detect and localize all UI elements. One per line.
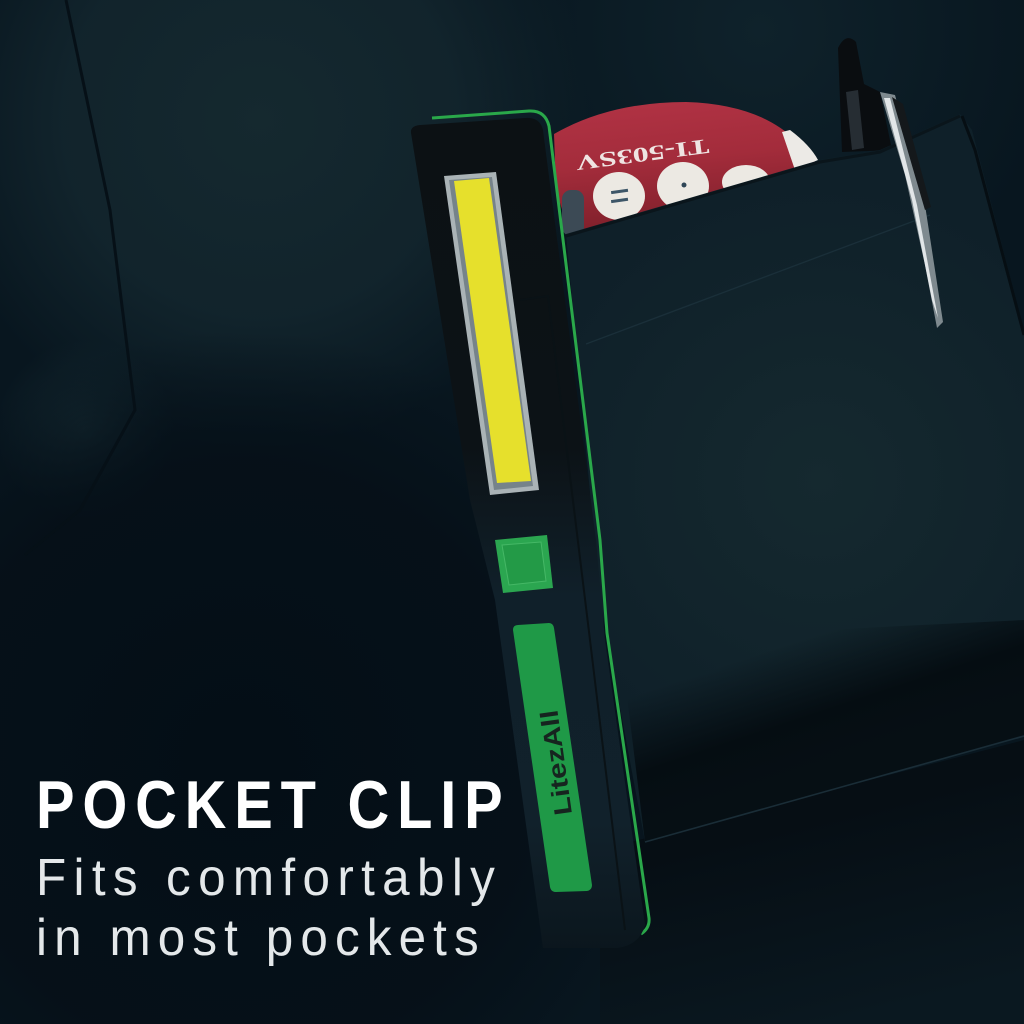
power button [495, 535, 553, 593]
calculator label: TI-503SV [574, 134, 710, 175]
COB yellow panel [454, 178, 531, 483]
green label strip [513, 623, 592, 892]
calculator keys [562, 162, 770, 236]
heading: POCKET CLIP [36, 768, 503, 843]
pocket [566, 114, 1024, 842]
flashlight body [411, 118, 645, 948]
sleeve seam [25, 0, 135, 555]
flashlight [411, 111, 649, 948]
pen clip over pocket [880, 92, 943, 328]
COB lens frame [444, 172, 539, 495]
pen in pocket [838, 38, 892, 152]
subtext line 2: in most pockets [36, 908, 479, 966]
subtext line 1: Fits comfortably [36, 848, 495, 906]
calculator [554, 102, 818, 236]
flashlight green edge line [432, 111, 649, 934]
brand logo: LitezAll [535, 708, 578, 817]
